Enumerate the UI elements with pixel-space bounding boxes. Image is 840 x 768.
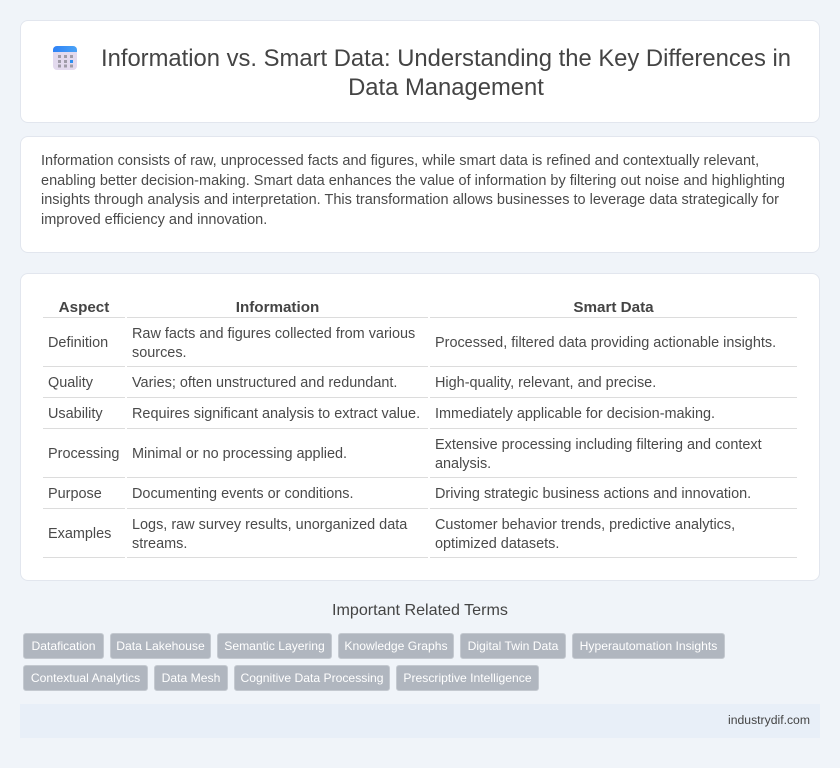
row: definition: Definition [48,335,108,351]
row: purpose: Documenting events or conditions. [132,486,354,502]
row: examples [48,517,735,552]
row: processing: Extensive processing including filtering and context [435,437,762,453]
row: definition: sources. [132,345,187,361]
intro text: improved efficiency and innovation. [41,212,267,228]
table header: Aspect [59,299,109,316]
related term tags: Data Lakehouse [116,639,205,653]
row: processing: analysis. [435,456,491,472]
related term tags: Datafication [31,639,96,653]
row: usability: Requires significant analysis to extract value. [132,406,420,422]
title: Information vs. Smart Data: Understanding the Key Differences in [101,45,791,72]
related term tags: Cognitive Data Processing [240,671,384,685]
title: Data Management [348,74,544,101]
related term tags: Semantic Layering [224,639,325,653]
row: definition: Raw facts and figures collected from various [132,326,415,342]
related term tags: Hyperautomation Insights [580,639,717,653]
row: purpose [48,486,751,502]
footer [20,704,820,738]
related term tags: Data Mesh [162,671,220,685]
intro text: Information consists of raw, unprocessed facts and figures, while smart data is refined and contextually relevant, [41,153,759,169]
intro text: enabling better decision-making. Smart data enhances the value of information by filtering out noise and highlighting [41,173,785,189]
row: usability [48,406,715,422]
row: examples: streams. [132,536,187,552]
row: processing: Processing [48,446,119,462]
row: examples: Customer behavior trends, predictive analytics, [435,517,735,533]
row: purpose: Driving strategic business actions and innovation. [435,486,751,502]
table header [59,299,654,316]
title [101,45,791,101]
related term tags: Digital Twin Data [468,639,558,653]
panel: title card [20,20,820,123]
row: processing: Minimal or no processing applied. [132,446,347,462]
row: examples: Examples [48,526,111,542]
heading: related terms: Important Related Terms [332,601,508,619]
row: quality: Quality [48,375,93,391]
row: purpose: Purpose [48,486,102,502]
comparison table [43,299,797,558]
panel: comparison table [20,273,820,581]
row: quality: Varies; often unstructured and redundant. [132,375,397,391]
panel: introduction [20,136,820,253]
intro text [41,153,785,228]
row: definition: Processed, filtered data providing actionable insights. [435,335,776,351]
icon: calendar [53,46,77,70]
row: examples: Logs, raw survey results, unorganized data [132,517,407,533]
row: quality [48,375,656,391]
footer: industrydif.com [728,713,810,727]
related term tags: Contextual Analytics [31,671,140,685]
row: quality: High-quality, relevant, and precise. [435,375,656,391]
row: usability: Usability [48,406,103,422]
related term tags: Knowledge Graphs [344,639,448,653]
row: usability: Immediately applicable for decision-making. [435,406,715,422]
table header: Smart Data [573,299,654,316]
related term tags [23,633,725,691]
row: definition [48,326,776,361]
related term tags: Prescriptive Intelligence [403,671,532,685]
intro text: insights through analysis and interpretation. This transformation allows businesses to leverage data strategically for [41,192,779,208]
table header: Information [236,299,319,316]
row: examples: optimized datasets. [435,536,559,552]
row: processing [48,437,762,472]
